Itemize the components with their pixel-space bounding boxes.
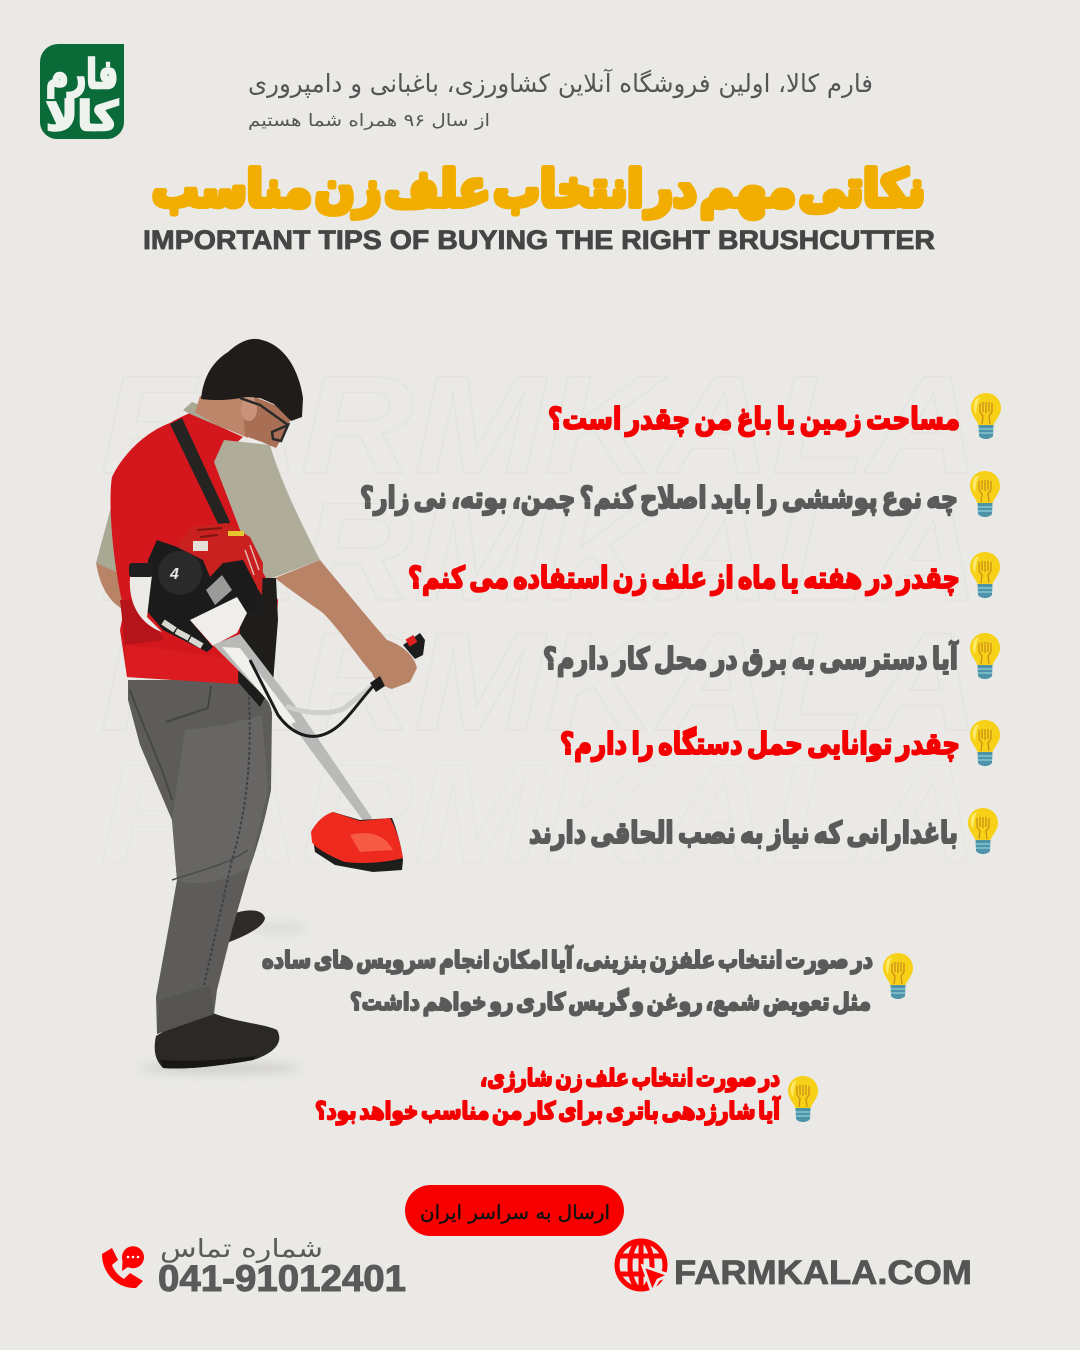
ground shadows [140,1062,300,1074]
shipping badge [405,1185,624,1236]
title: English: IMPORTANT TIPS OF BUYING THE RIGHT BRUSHCUTTER [143,225,935,255]
jeans [128,680,272,1034]
handlebar [286,682,378,713]
website block [617,1241,972,1292]
title: Persian: نکاتی مهم در انتخاب علف زن مناسب [152,160,925,219]
tip 7: در صورت انتخاب علفزن بنزینی، آیا امکان انجام سرویس های ساده [262,945,873,974]
icon: light bulb [883,953,913,999]
hair [201,339,303,421]
tip 3: چقدر در هفته یا ماه از علف زن استفاده می کنم؟ [408,561,960,596]
watermark: FARMKALA [100,346,980,892]
face [243,397,292,448]
header tagline: از سال ۹۶ همراه شما هستیم [248,111,490,131]
cutter guard [313,812,403,872]
shirt collar [183,402,228,430]
tip 8: در صورت انتخاب علف زن شارژی، [480,1064,780,1092]
engine red shroud [177,523,263,595]
neck [195,392,250,438]
icon: light bulb [970,471,1000,517]
logo: Farmkala [40,44,124,140]
website address: FARMKALA.COM [674,1254,972,1292]
ear [241,397,257,421]
right arm [275,560,417,689]
left sleeve [96,500,128,576]
tip 5 [560,720,1000,766]
illustration: man with brushcutter [96,339,425,1074]
tip 8: آیا شارژدهی باتری برای کار من مناسب خواهد بود؟ [315,1096,781,1125]
icon: light bulb [968,808,998,854]
logo: Farmkala: فارم [46,52,118,98]
icon: light bulb [970,552,1000,598]
shipping badge: ارسال به سراسر ایران [420,1202,610,1224]
icon: light bulb [970,720,1000,766]
back arm [96,562,128,612]
hand grip [403,633,425,659]
front boot [155,1005,279,1068]
tip 4: آیا دسترسی به برق در محل کار دارم؟ [543,640,959,677]
tip 5: چقدر توانایی حمل دستگاه را دارم؟ [560,726,960,762]
glasses [240,398,288,441]
tip 7: مثل تعویض شمع، روغن و گریس کاری رو خواهم داشت؟ [350,988,871,1016]
tip 1: مساحت زمین یا باغ من چقدر است؟ [548,402,960,437]
engine strap bag [238,578,278,707]
right sleeve [214,440,320,580]
tip 7 [262,945,913,1016]
tip 2 [360,471,1000,517]
white fuel tank [130,575,162,632]
contact label: شماره تماس [160,1234,323,1263]
icon: light bulb [971,393,1001,439]
grip collar [370,676,385,692]
header tagline: فارم کالا، اولین فروشگاه آنلاین کشاورزی، باغبانی و دامپروری [248,68,873,99]
tip 3 [408,552,1000,598]
cable [250,660,376,736]
icon: light bulb [788,1076,818,1122]
watermark: FARMKALA: FARMKALA [100,346,980,503]
watermark: FARMKALA: FARMKALA [100,473,980,630]
illustration: man with brushcutter: 4 [169,566,179,583]
logo: Farmkala: کالا [46,94,119,140]
tip 8 [315,1064,818,1125]
watermark: FARMKALA: FARMKALA [100,735,980,892]
icon: globe with cursor [617,1241,669,1292]
back boot [227,910,265,943]
tip 6: باغدارانی که نیاز به نصب الحاقی دارند [529,816,958,851]
shaft [213,634,372,823]
tip 6 [529,808,998,854]
red vest [110,413,278,684]
watermark: FARMKALA: FARMKALA [100,603,980,760]
icon: light bulb [970,633,1000,679]
engine black body [146,540,257,652]
contact block [102,1234,406,1299]
phone number: 041-91012401 [158,1258,406,1299]
header tagline [248,68,873,131]
icon: phone with chat bubble [102,1246,144,1288]
shoulder strap [170,418,230,532]
tip 4 [543,633,1000,679]
